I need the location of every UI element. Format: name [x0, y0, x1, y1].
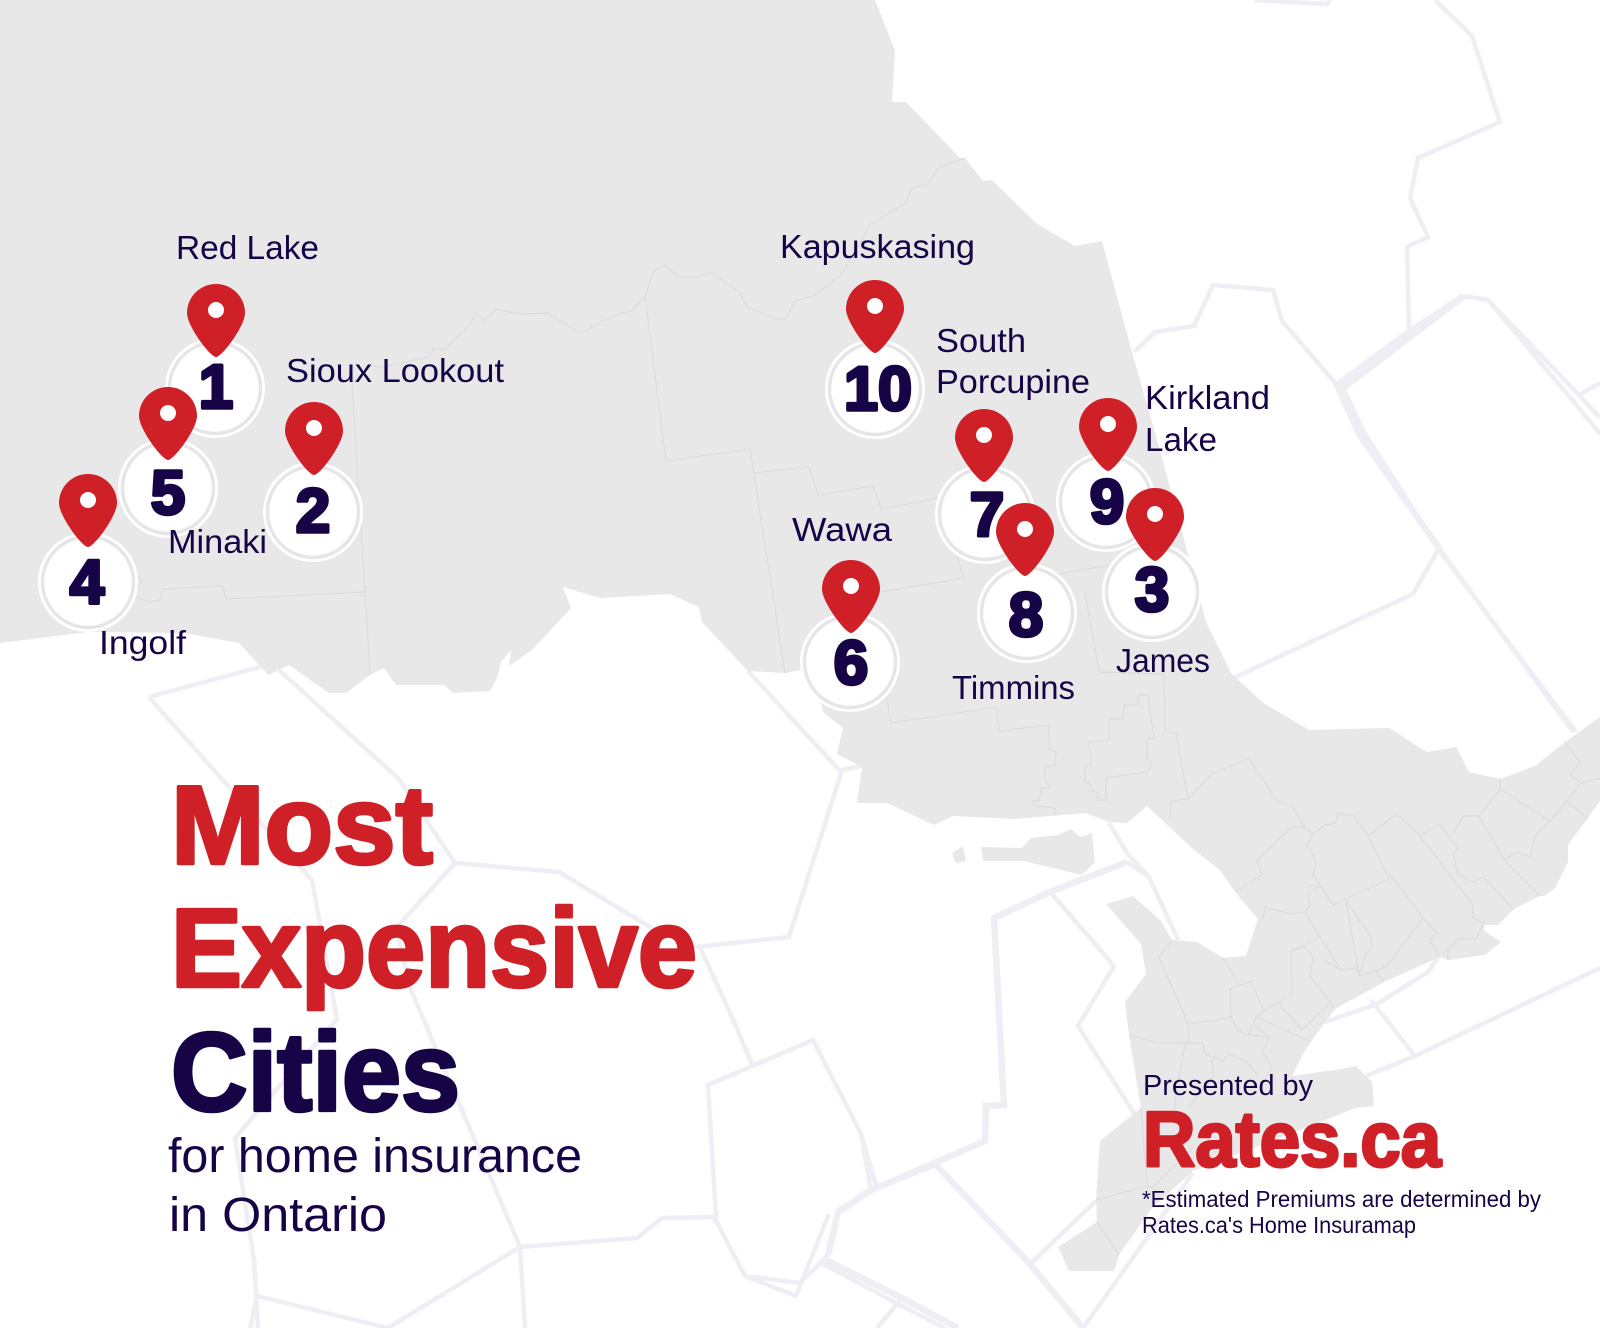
title: Most	[171, 764, 433, 888]
marker 8: Timmins	[979, 503, 1075, 661]
title: Cities	[171, 1010, 460, 1134]
presented by: Presented by	[1143, 1070, 1313, 1102]
marker 4: Ingolf: 4	[70, 548, 105, 617]
marker 9: Kirkland Lake: 9	[1090, 468, 1124, 537]
city labels: South	[936, 322, 1026, 359]
marker 6: Wawa	[802, 560, 898, 710]
title	[171, 764, 697, 1134]
city labels: Red Lake	[176, 229, 319, 266]
city labels: Timmins	[952, 669, 1075, 706]
footnote: Rates.ca's Home Insuramap	[1142, 1212, 1416, 1238]
marker 7: South Porcupine: 7	[970, 481, 1004, 550]
city labels	[99, 228, 1270, 706]
city labels: Kirkland	[1145, 379, 1270, 416]
city labels: Ingolf	[99, 624, 187, 661]
marker 1: Red Lake: 1	[199, 353, 233, 422]
Manitoulin Island	[981, 829, 1095, 875]
city labels: Lake	[1145, 421, 1217, 458]
marker 2: Sioux Lookout: 2	[296, 477, 330, 546]
city labels: Porcupine	[936, 363, 1090, 400]
subtitle: in Ontario	[169, 1189, 387, 1242]
marker 8: Timmins: 8	[1009, 581, 1043, 650]
city labels: James	[1116, 642, 1210, 679]
marker 1: Red Lake	[167, 284, 263, 436]
title: Expensive	[171, 886, 697, 1010]
marker 3: James: 3	[1135, 556, 1169, 625]
district boundaries	[130, 158, 1600, 1255]
city labels: Sioux Lookout	[286, 352, 504, 389]
marker 6: Wawa: 6	[834, 629, 868, 698]
marker 4: Ingolf	[40, 474, 136, 630]
marker 10: Kapuskasing: 10	[844, 355, 912, 424]
logo: Rates.ca: Rates.ca	[1143, 1095, 1442, 1183]
marker 9: Kirkland Lake	[1058, 398, 1154, 550]
footnote	[1142, 1186, 1541, 1238]
city labels: Wawa	[792, 511, 893, 548]
subtitle	[168, 1130, 582, 1242]
city labels: Minaki	[168, 523, 267, 560]
marker 2: Sioux Lookout	[265, 402, 361, 560]
marker 5: Minaki: 5	[151, 459, 185, 528]
small island	[952, 846, 966, 863]
subtitle: for home insurance	[168, 1130, 582, 1183]
marker 5: Minaki	[120, 387, 216, 536]
footnote: *Estimated Premiums are determined by	[1142, 1186, 1541, 1212]
city labels: Kapuskasing	[780, 228, 975, 265]
marker 3: James	[1104, 488, 1200, 640]
marker 10: Kapuskasing	[827, 280, 923, 437]
marker 7: South Porcupine	[937, 409, 1033, 562]
